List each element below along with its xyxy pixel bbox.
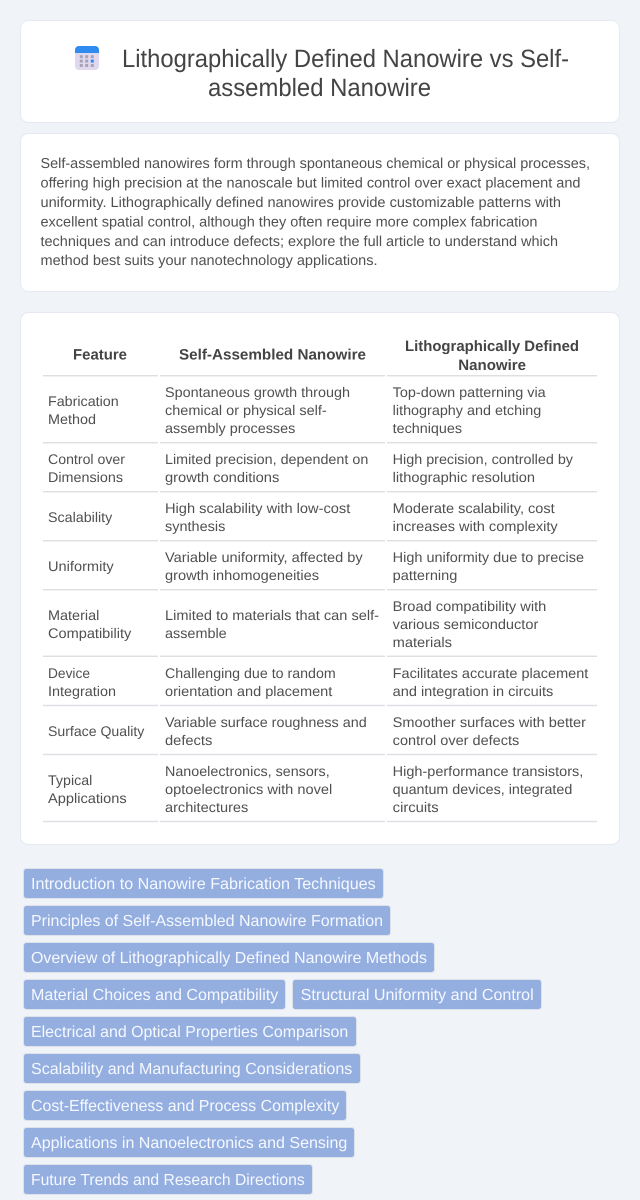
- table row: device integration: Facilitates accurate placement: [393, 665, 588, 681]
- table row: fabrication method: techniques: [393, 420, 462, 436]
- table row: control over dimensions: High precision, controlled by: [393, 451, 573, 467]
- table row: typical applications: Typical: [48, 772, 92, 788]
- table row: fabrication method: assembly processes: [165, 420, 295, 436]
- topic tags: [24, 868, 542, 1194]
- title: [122, 45, 569, 102]
- table row: surface quality: Smoother surfaces with better: [393, 714, 586, 730]
- panel: title card: [20, 20, 620, 122]
- tag: future trends: Future Trends and Research Directions: [31, 1172, 305, 1189]
- table row: typical applications: circuits: [393, 799, 439, 815]
- table row: scalability: [43, 500, 597, 541]
- tag: overview: [24, 942, 434, 972]
- table row: material compatibility: materials: [393, 634, 452, 650]
- table row: scalability: High scalability with low-cost: [165, 500, 350, 516]
- tag: scalability: [24, 1054, 360, 1084]
- table row: surface quality: [43, 714, 597, 755]
- table row: surface quality: control over defects: [393, 732, 519, 748]
- text block: summary paragraph: offering high precision at the nanoscale but limited control over exact placement and: [40, 176, 580, 192]
- table row: material compatibility: Material: [48, 607, 99, 623]
- table row: typical applications: Applications: [48, 790, 127, 806]
- tag: cost: Cost-Effectiveness and Process Complexity: [31, 1098, 339, 1115]
- table header row: Self-Assembled Nanowire: [179, 346, 366, 364]
- table row: device integration: Device: [48, 665, 90, 681]
- table row: material compatibility: various semiconductor: [393, 616, 539, 632]
- table row: typical applications: architectures: [165, 799, 248, 815]
- table row: scalability: Scalability: [48, 509, 112, 525]
- table row: device integration: Challenging due to random: [165, 665, 336, 681]
- table row: typical applications: Nanoelectronics, sensors,: [165, 763, 330, 779]
- tag: applications: Applications in Nanoelectronics and Sensing: [31, 1135, 347, 1152]
- title: assembled Nanowire: [208, 74, 431, 102]
- tag: scalability: Scalability and Manufacturing Considerations: [31, 1061, 352, 1078]
- table row: scalability: increases with complexity: [393, 518, 558, 534]
- table row: uniformity: growth inhomogeneities: [165, 567, 319, 583]
- table row: surface quality: defects: [165, 732, 212, 748]
- panel: introduction: [20, 134, 620, 292]
- table row: fabrication method: lithography and etching: [393, 402, 541, 418]
- table row: control over dimensions: Limited precision, dependent on: [165, 451, 368, 467]
- tag: material choices: Material Choices and Compatibility: [31, 987, 278, 1004]
- table header row: Feature: [73, 346, 127, 364]
- tag: introduction: [24, 868, 384, 898]
- tag: principles: Principles of Self-Assembled Nanowire Formation: [31, 913, 383, 930]
- table row: fabrication method: Fabrication: [48, 393, 119, 409]
- tag: principles: [24, 906, 390, 936]
- tag: structural uniformity: [292, 980, 542, 1010]
- table header row: Lithographically Defined: [405, 338, 579, 355]
- table row: material compatibility: Compatibility: [48, 625, 131, 641]
- tag: introduction: Introduction to Nanowire Fabrication Techniques: [31, 876, 376, 893]
- icon: calendar: [75, 46, 99, 70]
- text block: summary paragraph: excellent spatial control, although they often require more complex fabrication: [40, 214, 538, 230]
- table row: control over dimensions: [43, 451, 597, 492]
- table row: scalability: synthesis: [165, 518, 225, 534]
- tag: applications: [24, 1128, 354, 1158]
- table row: fabrication method: Top-down patterning via: [393, 384, 546, 400]
- text block: summary paragraph: [40, 156, 590, 269]
- table row: material compatibility: Broad compatibility with: [393, 598, 546, 614]
- table row: typical applications: optoelectronics with novel: [165, 781, 332, 797]
- text block: summary paragraph: techniques and can introduce defects; explore the full article to understand which: [40, 234, 558, 250]
- text block: summary paragraph: uniformity. Lithographically defined nanowires provide customizable patterns with: [40, 195, 561, 211]
- table header row: Nanowire: [458, 357, 526, 374]
- table row: material compatibility: assemble: [165, 625, 227, 641]
- tag: cost: [24, 1090, 346, 1120]
- table row: typical applications: [43, 763, 597, 822]
- table row: typical applications: quantum devices, integrated: [393, 781, 572, 797]
- table row: surface quality: Surface Quality: [48, 723, 144, 739]
- table header row: [43, 338, 597, 376]
- table row: uniformity: High uniformity due to precise: [393, 549, 584, 565]
- table row: device integration: and integration in circuits: [393, 683, 553, 699]
- table row: uniformity: Uniformity: [48, 558, 114, 574]
- table row: fabrication method: [43, 384, 597, 443]
- table row: fabrication method: chemical or physical self-: [165, 402, 327, 418]
- tag: future trends: [24, 1164, 312, 1194]
- tag: properties: [24, 1016, 356, 1046]
- table row: control over dimensions: growth conditions: [165, 469, 279, 485]
- table row: surface quality: Variable surface roughness and: [165, 714, 367, 730]
- table row: uniformity: patterning: [393, 567, 457, 583]
- text block: summary paragraph: Self-assembled nanowires form through spontaneous chemical or physical processes,: [40, 156, 590, 172]
- tag: structural uniformity: Structural Uniformity and Control: [301, 987, 534, 1004]
- table row: material compatibility: Limited to materials that can self-: [165, 607, 379, 623]
- table row: material compatibility: [43, 598, 597, 657]
- table row: fabrication method: Method: [48, 411, 96, 427]
- title: Lithographically Defined Nanowire vs Self-: [122, 45, 569, 73]
- tag: properties: Electrical and Optical Properties Comparison: [31, 1024, 348, 1041]
- panel: comparison table: [20, 312, 620, 844]
- tag: material choices: [24, 980, 286, 1010]
- table row: uniformity: [43, 549, 597, 590]
- table row: control over dimensions: Dimensions: [48, 469, 123, 485]
- tag: overview: Overview of Lithographically Defined Nanowire Methods: [31, 950, 427, 967]
- table row: scalability: Moderate scalability, cost: [393, 500, 555, 516]
- table row: device integration: Integration: [48, 683, 116, 699]
- table row: control over dimensions: lithographic resolution: [393, 469, 535, 485]
- table row: device integration: [43, 665, 597, 706]
- table row: control over dimensions: Control over: [48, 451, 125, 467]
- table row: typical applications: High-performance transistors,: [393, 763, 583, 779]
- table row: fabrication method: Spontaneous growth through: [165, 384, 350, 400]
- table row: device integration: orientation and placement: [165, 683, 332, 699]
- table row: uniformity: Variable uniformity, affected by: [165, 549, 363, 565]
- text block: summary paragraph: method best suits your nanotechnology applications.: [40, 253, 377, 269]
